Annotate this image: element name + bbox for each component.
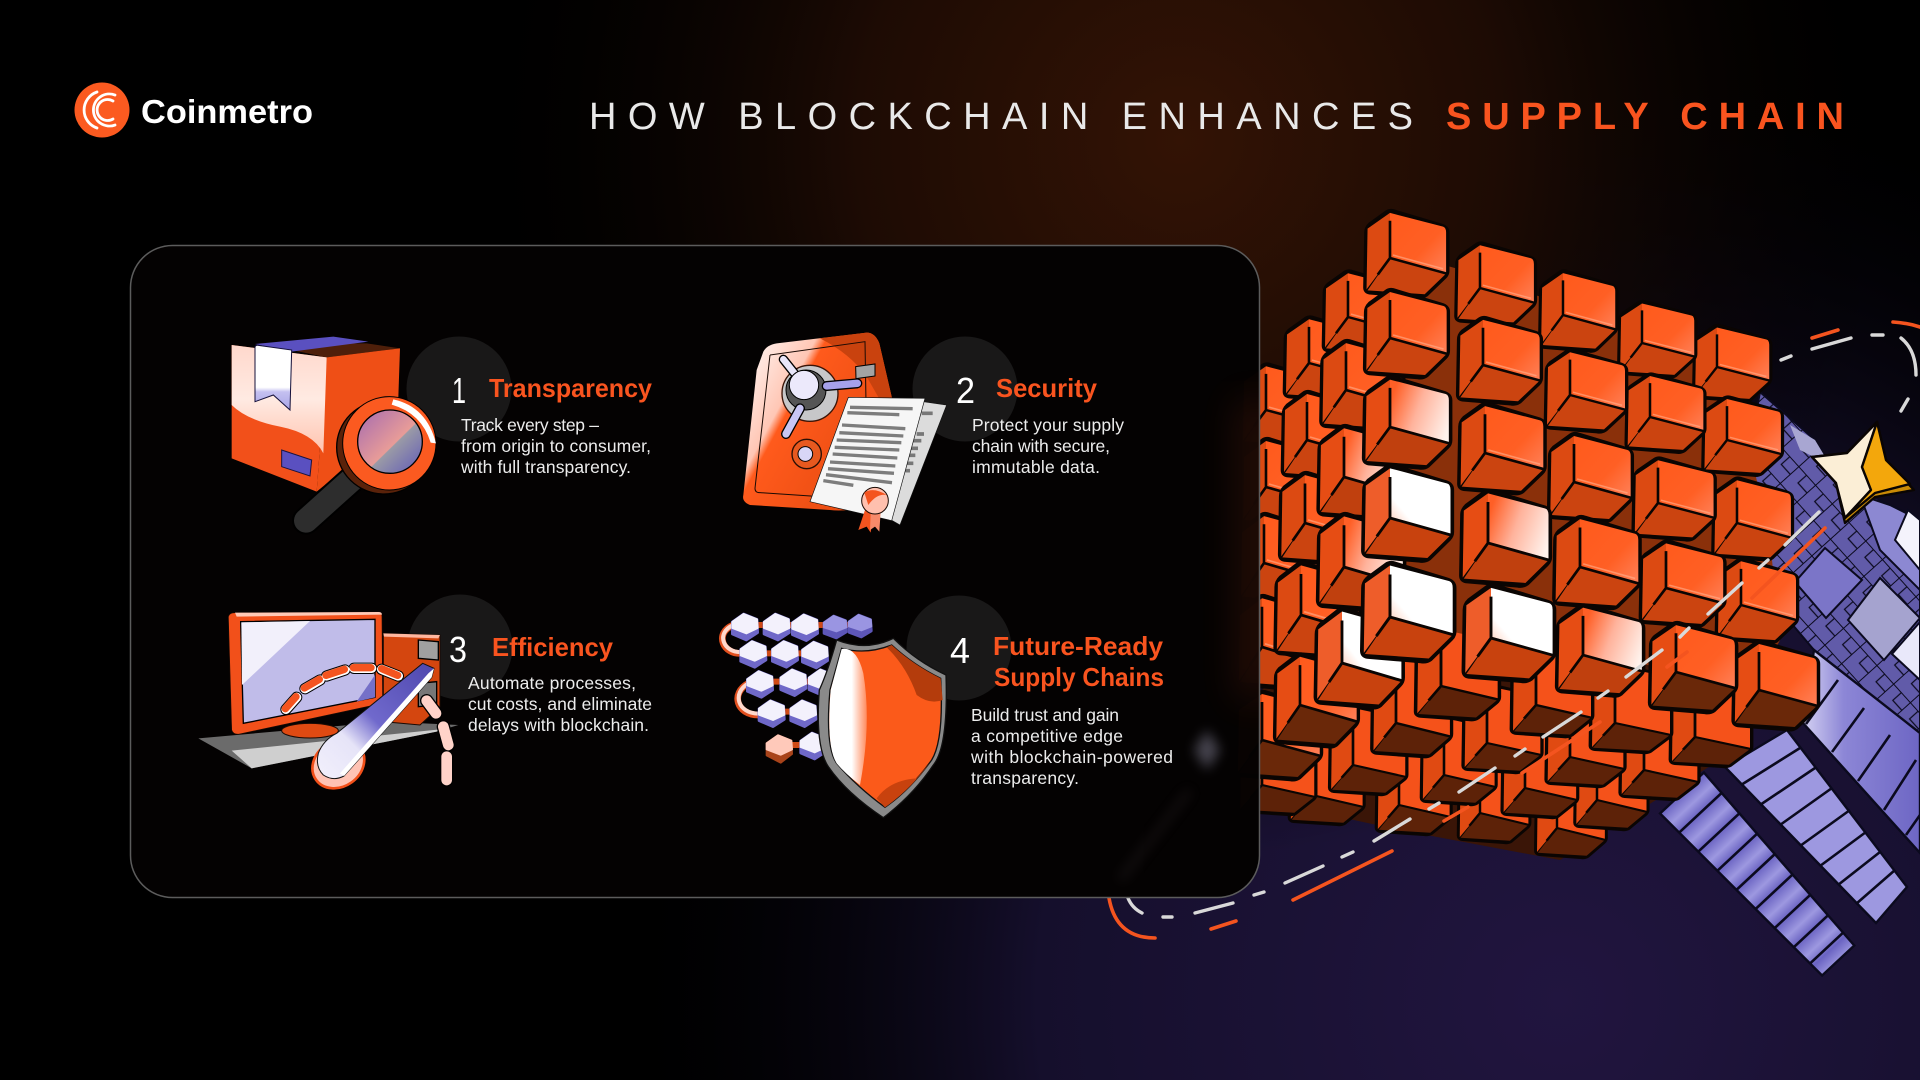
feature 4: future-ready supply chains: [722, 596, 1173, 818]
feature 2: security: [743, 333, 1124, 533]
title: HOW BLOCKCHAIN ENHANCES: [589, 96, 1413, 138]
title: [589, 96, 1844, 138]
number badge 3: 3: [449, 629, 467, 670]
feature 1: transparency: [232, 336, 653, 521]
description: security: [972, 415, 1124, 477]
main card panel: [130, 246, 1275, 898]
icon: safe with certificate: [743, 333, 947, 533]
title: SUPPLY CHAIN: [1446, 96, 1844, 138]
heading: future-ready supply chains: Future-Ready: [993, 631, 1164, 661]
description: efficiency: cut costs, and eliminate: [468, 694, 652, 714]
logo: coinmetro: [74, 82, 313, 138]
heading: security: Security: [996, 373, 1098, 403]
illustration: gold star: [1812, 422, 1914, 523]
description: security: chain with secure,: [972, 436, 1110, 456]
description: transparency: [460, 415, 651, 477]
description: transparency: Track every step –: [461, 415, 599, 435]
description: future-ready supply chains: [970, 705, 1173, 788]
heading: future-ready supply chains: Supply Chains: [994, 662, 1164, 692]
description: security: immutable data.: [972, 457, 1100, 477]
illustration: orange block cube wall: [1236, 210, 1819, 860]
motion trails: orange lines: [1109, 322, 1920, 938]
number badge 4: [906, 596, 1012, 700]
icon: parcel box with magnifier: [232, 337, 436, 521]
heading: transparency: Transparency: [489, 373, 653, 403]
number badge 3: [408, 594, 512, 700]
heading: future-ready supply chains: [993, 631, 1164, 692]
icon: shield with block grid: [722, 614, 946, 818]
heading: efficiency: Efficiency: [492, 632, 614, 662]
description: transparency: with full transparency.: [460, 457, 631, 477]
feature 3: efficiency: [198, 594, 652, 798]
description: security: Protect your supply: [972, 415, 1124, 435]
description: future-ready supply chains: a competitive edge: [971, 726, 1123, 746]
logo mark: [74, 82, 130, 138]
description: future-ready supply chains: transparency.: [971, 768, 1079, 788]
number badge 1: [406, 336, 512, 442]
icon: computer with chain link: [198, 612, 458, 798]
number badge 4: 4: [950, 630, 970, 671]
number badge 1: 1: [452, 370, 466, 411]
number badge 2: 2: [956, 370, 975, 411]
description: efficiency: [468, 673, 652, 735]
motion trails: white dashes: [1128, 335, 1916, 917]
description: efficiency: delays with blockchain.: [468, 715, 649, 735]
logo wordmark: Coinmetro: [141, 93, 313, 130]
description: future-ready supply chains: Build trust and gain: [971, 705, 1119, 725]
number badge 2: [912, 336, 1018, 442]
description: future-ready supply chains: with blockchain-powered: [970, 747, 1173, 767]
blurred backdrop glow inside card: [1190, 397, 1259, 772]
description: efficiency: Automate processes,: [468, 673, 636, 693]
description: transparency: from origin to consumer,: [461, 436, 651, 456]
illustration: purple block chain strips: [1660, 392, 1920, 981]
